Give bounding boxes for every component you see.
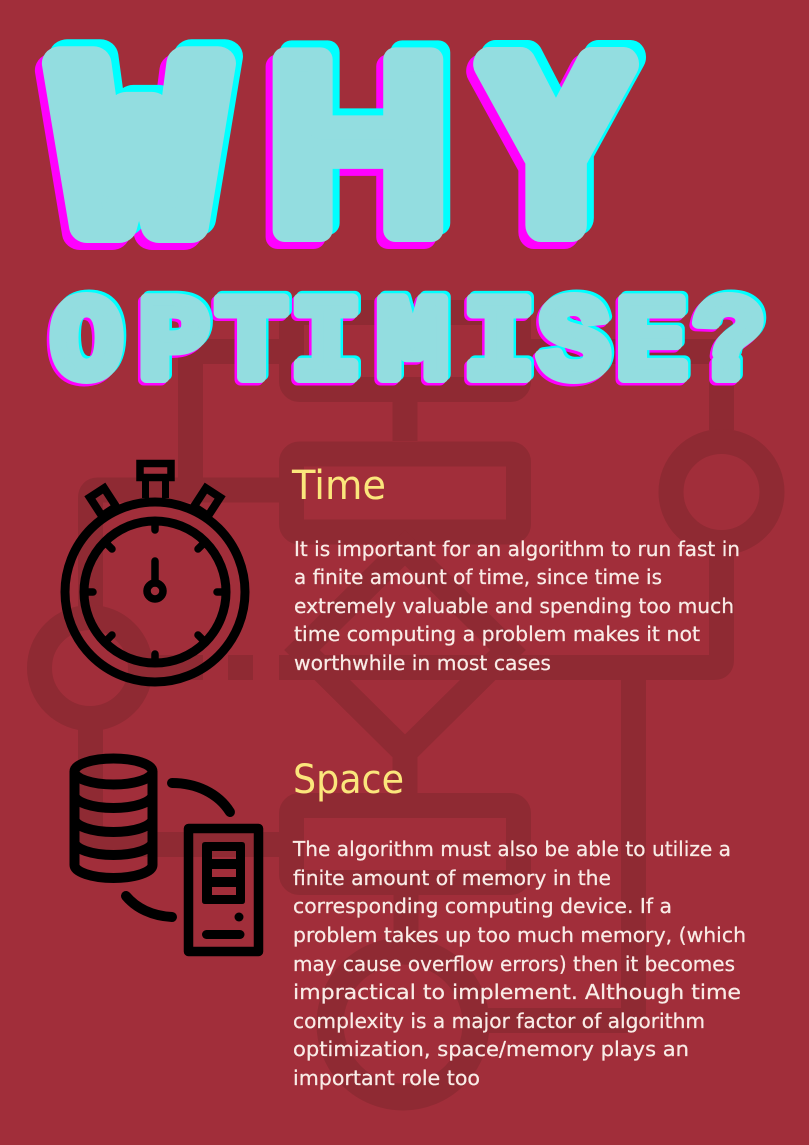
text block: space description [292,837,746,1090]
title: WHY: W [60,21,219,301]
text block: space description: problem takes up too much memory, (which [293,923,746,947]
text block: time description: extremely valuable and spending too much [294,594,734,618]
text block: space description: finite amount of memory in the [293,866,611,890]
text block: time description: time computing a problem makes it not [294,622,700,646]
text block: time description: It is important for an algorithm to run fast in [294,537,740,561]
heading: Space: Space [293,757,404,803]
text block: space description: important role too [293,1066,480,1090]
text block: space description: The algorithm must also be able to utilize a [292,837,731,861]
text block: time description: a finite amount of time, since time is [294,565,662,589]
text block: space description: may cause overflow errors) then it becomes [293,952,735,976]
title: OPTIMISE?: OPTIMISE? [51,280,764,413]
heading: Time: Time [291,463,386,509]
flowchart background pattern [40,312,772,1097]
text block: time description: worthwhile in most cases [294,651,551,675]
text block: space description: optimization, space/memory plays an [293,1037,689,1061]
text block: space description: impractical to implement. Although time [293,980,741,1004]
text block: space description: complexity is a major factor of algorithm [293,1009,705,1033]
title: WHY [60,5,627,301]
icon: stopwatch [65,464,245,682]
icon: database and server [74,758,258,952]
title: WHY: H [268,5,448,283]
title: WHY: Y [485,13,627,275]
text block: time description [294,537,740,675]
text block: space description: corresponding computing device. If a [293,894,672,918]
